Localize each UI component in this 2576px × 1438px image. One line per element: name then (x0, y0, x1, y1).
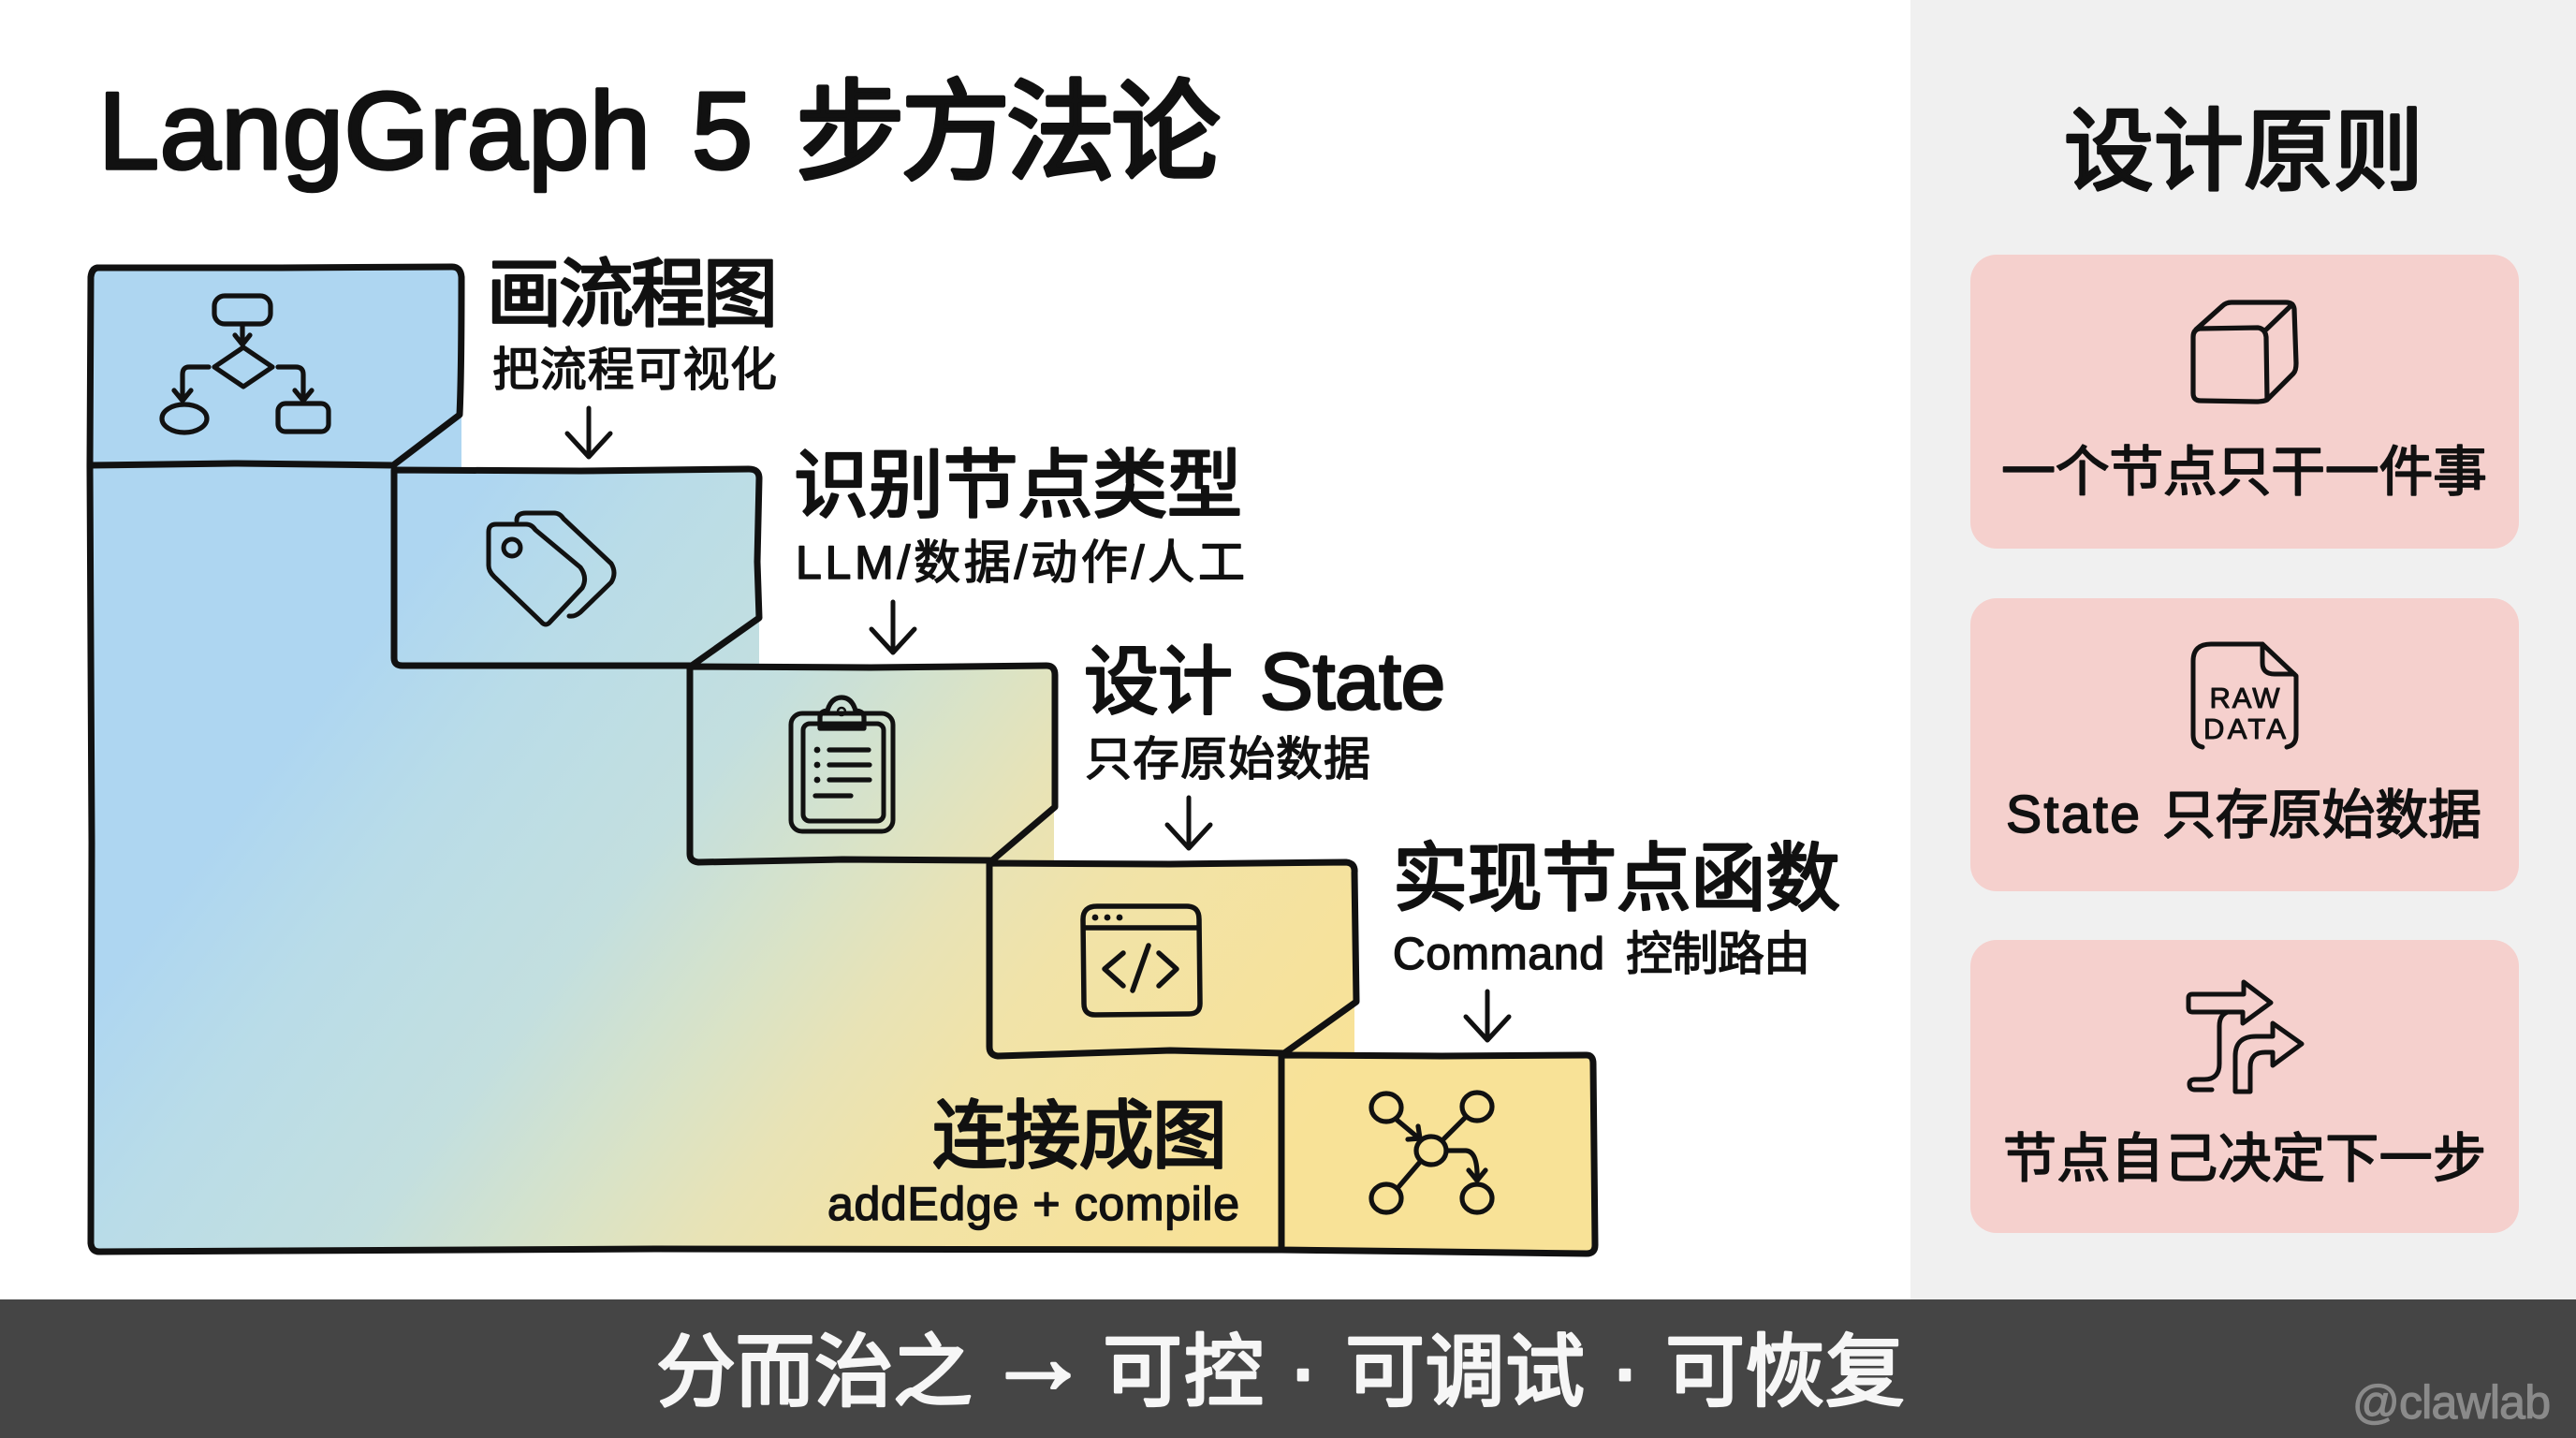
card: node decides (1970, 940, 2519, 1233)
title (98, 69, 1221, 194)
step 1 text: 把流程可视化 (492, 344, 777, 396)
icon: raw data file: RAW (2209, 682, 2280, 714)
icon: cube (2193, 302, 2296, 402)
card 3 label: 节点自己决定下一步 (2003, 1129, 2486, 1189)
bottom takeaway bar: 可控 (1103, 1328, 1264, 1417)
icon: clipboard (791, 697, 893, 831)
arrow: step 3 to step 4 (1167, 798, 1210, 848)
step 2 text (794, 444, 1245, 589)
bottom takeaway bar: 可调试 (1345, 1328, 1585, 1417)
step 2 text: 识别节点类型 (794, 444, 1242, 527)
step 4 text: Command (1393, 930, 1604, 979)
card 2 label: 只存原始数据 (2162, 785, 2481, 845)
outline: left and bottom edge (90, 465, 1281, 1252)
icon: raw data file: DATA (2203, 712, 2286, 745)
icon: graph network (1371, 1093, 1492, 1212)
step 3 text: State (1260, 638, 1445, 726)
bottom takeaway bar: → (986, 1299, 1090, 1416)
step 1 text: 画流程图 (487, 253, 778, 336)
panel: design principles (1910, 0, 2576, 1299)
step 3 text (1084, 638, 1445, 785)
step 3 outline (690, 666, 1055, 862)
icon: branching arrows (2188, 982, 2302, 1092)
watermark: @clawlab (2352, 1376, 2551, 1429)
arrow: step 1 to step 2 (567, 408, 610, 457)
step 2 text: LLM/数据/动作/人工 (796, 536, 1245, 589)
side heading: 设计原则 (2064, 102, 2423, 202)
bottom takeaway bar: · (1609, 1316, 1641, 1421)
bottom takeaway bar (0, 1299, 2576, 1438)
icon: code window (1083, 906, 1200, 1015)
bottom takeaway bar: · (1287, 1316, 1319, 1421)
step 1 outline (90, 267, 461, 465)
arrow: step 4 to step 5 (1466, 991, 1509, 1040)
step 5 subtitle: addEdge + compile (827, 1178, 1239, 1230)
panel: staircase of five steps (90, 267, 1595, 1254)
step 3 text: 只存原始数据 (1085, 733, 1370, 785)
icon: raw data file (2193, 644, 2296, 747)
staircase gradient fill (91, 267, 1593, 1252)
step 5 heading: 连接成图 (932, 1094, 1227, 1178)
card 1 label: 一个节点只干一件事 (2001, 442, 2487, 503)
title: LangGraph (98, 69, 651, 192)
step 4 text: 控制路由 (1626, 928, 1810, 980)
card 2 label (2006, 785, 2481, 845)
bottom takeaway bar: 分而治之 (656, 1328, 973, 1417)
icon: flowchart (162, 296, 329, 433)
arrow: step 2 to step 3 (871, 602, 915, 653)
card: raw state (1970, 598, 2519, 891)
title: 步方法论 (796, 71, 1221, 194)
step 4 text (1393, 837, 1840, 980)
card: single responsibility (1970, 255, 2519, 549)
step 5 outline (1281, 1055, 1595, 1254)
icon: tags (489, 513, 614, 624)
title: 5 (692, 69, 753, 192)
bottom takeaway bar: 可恢复 (1665, 1328, 1905, 1417)
side panel background (1910, 0, 2576, 1299)
card 2 label: State (2006, 785, 2140, 844)
step 3 text: 设计 (1084, 640, 1233, 724)
step 2 outline (394, 469, 759, 666)
step 4 text: 实现节点函数 (1393, 837, 1840, 920)
step 4 outline (989, 862, 1356, 1056)
step 1 text (487, 253, 778, 396)
